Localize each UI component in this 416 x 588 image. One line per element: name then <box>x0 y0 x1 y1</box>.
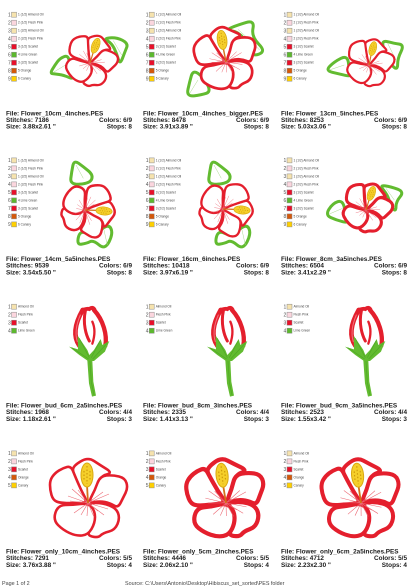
file details <box>281 548 407 569</box>
file details: File: Flower_only_5cm_2inches.PES <box>143 548 254 555</box>
colour legend: 2 (1/2) Flesh Pink <box>156 21 181 25</box>
file details: Size: 3.76x3.88 " <box>6 562 56 569</box>
colour legend: Flesh Pink <box>294 313 309 317</box>
colour legend: 3 <box>8 321 11 327</box>
colour legend: 7 <box>8 60 11 66</box>
colour legend: 5 Orange <box>156 69 169 73</box>
colour legend: 8 <box>146 68 149 74</box>
file details: Colors: 6/9 <box>99 263 132 270</box>
file details: Stitches: 10418 <box>143 263 190 270</box>
colour legend: 9 <box>146 77 149 83</box>
colour legend <box>8 12 44 83</box>
colour legend: Almond Oil <box>18 451 34 455</box>
file details: Colors: 4/4 <box>99 409 132 416</box>
file details: File: Flower_10cm_4inches.PES <box>6 110 104 117</box>
colour legend: 2 <box>284 20 286 26</box>
colour legend <box>146 158 182 228</box>
colour legend: 1 (1/2) Almond Oil <box>294 158 319 162</box>
panel: Flower_only_10cm_4inches <box>6 451 132 569</box>
colour legend: 1 (2/2) Almond Oil <box>294 174 319 178</box>
file details: File: Flower_bud_6cm_2a5inches.PES <box>6 402 123 409</box>
colour legend: 6 Canary <box>18 77 31 81</box>
icon: hibiscus with leaves <box>60 162 117 247</box>
icon: hibiscus with leaves <box>328 34 402 91</box>
colour legend: 4 <box>284 182 286 188</box>
colour legend: Almond Oil <box>156 305 172 309</box>
colour legend: 5 <box>8 190 11 196</box>
colour legend: 6 <box>284 52 286 58</box>
colour legend: 9 <box>8 222 11 228</box>
panel: Flower_16cm_6inches <box>143 158 269 276</box>
icon: hibiscus with leaves <box>198 162 255 247</box>
colour legend: 2 <box>146 459 149 465</box>
colour legend: 6 <box>284 198 286 204</box>
file details: File: Flower_bud_9cm_3a5inches.PES <box>281 402 398 409</box>
file details: Stitches: 6504 <box>281 263 324 270</box>
colour legend: 2 (1/2) Flesh Pink <box>294 21 319 25</box>
file details: Colors: 6/9 <box>99 117 132 124</box>
colour legend: 3 (1/2) Scarlet <box>294 45 314 49</box>
colour legend: 5 Orange <box>156 214 169 218</box>
colour legend: 3 (1/2) Scarlet <box>156 45 176 49</box>
colour legend: 1 (2/2) Almond Oil <box>294 29 319 33</box>
colour legend: 1 (1/2) Almond Oil <box>18 158 44 162</box>
file details <box>281 110 407 131</box>
colour legend: Flesh Pink <box>156 313 171 317</box>
file details: Size: 1.41x3.13 " <box>143 416 193 423</box>
icon: hibiscus with leaves <box>51 28 127 92</box>
file details: Stops: 8 <box>244 124 269 131</box>
file details: Size: 3.91x3.89 " <box>143 124 193 131</box>
panel: Flower_only_5cm_2inches <box>143 451 269 569</box>
colour legend: 1 <box>8 12 11 18</box>
file details: File: Flower_only_10cm_4inches.PES <box>6 548 121 555</box>
colour legend: 2 (1/2) Flesh Pink <box>18 166 43 170</box>
colour legend: 2 <box>284 459 286 465</box>
colour legend: Flesh Pink <box>156 459 171 463</box>
file details <box>143 402 269 423</box>
colour legend: 1 (1/2) Almond Oil <box>156 13 182 17</box>
file details: Stitches: 8478 <box>143 117 186 124</box>
file details: File: Flower_14cm_5a5inches.PES <box>6 256 111 263</box>
colour legend: 4 <box>146 475 149 481</box>
colour legend: 4 Lime Green <box>294 53 313 57</box>
panel: Flower_bud_6cm_2a5inches <box>6 304 132 423</box>
colour legend: 2 <box>8 459 11 465</box>
colour legend: 3 (2/2) Scarlet <box>294 61 314 65</box>
file details: Colors: 5/5 <box>99 555 132 562</box>
colour legend: 9 <box>146 222 149 228</box>
file details: Stops: 8 <box>382 270 407 276</box>
colour legend: 1 (1/2) Almond Oil <box>156 158 182 162</box>
colour legend: 3 <box>146 28 149 34</box>
file details: Stitches: 4446 <box>143 555 186 562</box>
colour legend: 1 <box>284 451 286 457</box>
file details: Stitches: 7186 <box>6 117 49 124</box>
colour legend: 3 <box>284 321 286 327</box>
file details: Stitches: 2335 <box>143 409 186 416</box>
colour legend: 3 <box>8 174 11 180</box>
file details: Stitches: 4712 <box>281 555 324 562</box>
file details: Colors: 4/4 <box>374 409 407 416</box>
colour legend: Flesh Pink <box>294 459 309 463</box>
file details: Stops: 3 <box>382 416 407 423</box>
colour legend: 8 <box>284 68 286 74</box>
colour legend: 3 <box>284 467 286 473</box>
page number: Page 1 of 2 <box>2 581 30 587</box>
file details: Stitches: 8253 <box>281 117 324 124</box>
file details: Stitches: 7291 <box>6 555 49 562</box>
colour legend: 5 <box>284 44 286 50</box>
colour legend: Orange <box>294 475 304 479</box>
colour legend: 5 Orange <box>294 214 307 218</box>
colour legend: 6 <box>146 52 149 58</box>
colour legend: 3 <box>8 28 11 34</box>
file details <box>281 402 407 423</box>
colour legend: 7 <box>284 206 286 212</box>
colour legend: 6 Canary <box>18 222 31 226</box>
colour legend: 3 (1/2) Scarlet <box>156 190 176 194</box>
file details: Stitches: 1968 <box>6 409 49 416</box>
file details: Colors: 6/9 <box>374 263 407 270</box>
file details: Colors: 6/9 <box>236 263 269 270</box>
colour legend: 3 <box>8 467 11 473</box>
file details <box>6 548 132 569</box>
file details: Size: 3.41x2.29 " <box>281 270 331 276</box>
colour legend: 2 (2/2) Flesh Pink <box>294 37 319 41</box>
colour legend: 4 <box>8 36 11 42</box>
colour legend: 6 Canary <box>156 222 169 226</box>
colour legend: 1 (2/2) Almond Oil <box>18 29 44 33</box>
colour legend: 3 (2/2) Scarlet <box>18 206 38 210</box>
colour legend: 4 <box>284 36 286 42</box>
colour legend: Canary <box>156 483 166 487</box>
colour legend: 8 <box>8 214 11 220</box>
colour legend: 7 <box>284 60 286 66</box>
icon: flower bud <box>207 308 247 397</box>
colour legend: 2 <box>8 20 11 26</box>
colour legend: 2 <box>8 313 11 319</box>
file details: Stops: 8 <box>244 270 269 276</box>
file details: Stops: 3 <box>107 416 132 423</box>
colour legend: 5 <box>146 190 149 196</box>
colour legend: 6 <box>8 52 11 58</box>
colour legend: 4 Lime Green <box>156 198 175 202</box>
colour legend: Scarlet <box>18 467 28 471</box>
colour legend: 3 <box>284 28 286 34</box>
colour legend: 3 (2/2) Scarlet <box>156 61 176 65</box>
colour legend: 2 <box>146 313 149 319</box>
colour legend <box>146 12 182 83</box>
colour legend: 6 Canary <box>156 77 169 81</box>
file details <box>6 256 132 276</box>
colour legend: 2 <box>284 313 286 319</box>
colour legend: 2 <box>8 166 11 172</box>
colour legend: 1 <box>284 305 286 311</box>
colour legend <box>146 451 172 489</box>
panel: Flower_14cm_5a5inches <box>6 158 132 276</box>
file details: Stops: 4 <box>107 562 132 569</box>
colour legend: 4 <box>146 329 149 335</box>
colour legend: 1 <box>146 305 149 311</box>
colour legend: 1 <box>284 158 286 164</box>
file details: Stops: 8 <box>382 124 407 131</box>
colour legend: 3 (1/2) Scarlet <box>18 45 38 49</box>
panel: Flower_only_6cm_2a5inches <box>281 451 407 569</box>
colour legend: 6 <box>8 198 11 204</box>
colour legend: 5 <box>146 483 149 489</box>
colour legend: 9 <box>284 77 286 83</box>
file details: Size: 1.55x3.42 " <box>281 416 331 423</box>
source path: Source: C:\Users\Antonio\Desktop\Hibiscus_set_sorted\PES folder <box>125 581 285 587</box>
panel: Flower_13cm_5inches <box>281 12 407 131</box>
colour legend: Scarlet <box>294 467 304 471</box>
colour legend: Orange <box>18 475 29 479</box>
colour legend: 1 <box>284 12 286 18</box>
file details: Size: 3.88x2.61 " <box>6 124 56 131</box>
colour legend: 1 <box>8 451 11 457</box>
colour legend: 4 <box>284 475 286 481</box>
colour legend <box>284 451 309 489</box>
colour legend: Scarlet <box>294 321 304 325</box>
colour legend: Almond Oil <box>18 305 34 309</box>
file details: Colors: 6/9 <box>374 117 407 124</box>
colour legend: Scarlet <box>156 321 166 325</box>
colour legend: 9 <box>284 222 286 228</box>
colour legend: 3 <box>284 174 286 180</box>
colour legend: 6 Canary <box>294 77 307 81</box>
colour legend: Canary <box>18 483 29 487</box>
colour legend: Flesh Pink <box>18 313 33 317</box>
colour legend: 1 (2/2) Almond Oil <box>156 174 182 178</box>
colour legend: 1 (1/2) Almond Oil <box>18 13 44 17</box>
colour legend: 4 <box>8 475 11 481</box>
colour legend: 6 Canary <box>294 222 307 226</box>
colour legend: 1 (2/2) Almond Oil <box>156 29 182 33</box>
colour legend: Orange <box>156 475 167 479</box>
colour legend: 1 (1/2) Almond Oil <box>294 13 319 17</box>
colour legend: Flesh Pink <box>18 459 33 463</box>
file details: File: Flower_only_6cm_2a5inches.PES <box>281 548 399 555</box>
colour legend <box>284 158 319 228</box>
colour legend: 3 <box>146 174 149 180</box>
colour legend: 1 <box>146 158 149 164</box>
colour legend: 3 (2/2) Scarlet <box>18 61 38 65</box>
panel: Flower_bud_8cm_3inches <box>143 304 269 423</box>
colour legend: Lime Green <box>18 329 35 333</box>
panel: Flower_10cm_4inches_bigger <box>143 12 269 131</box>
file details: Size: 2.06x2.10 " <box>143 562 193 569</box>
colour legend: 6 <box>146 198 149 204</box>
colour legend <box>8 451 34 489</box>
file details: Stitches: 2523 <box>281 409 324 416</box>
file details: Size: 2.23x2.30 " <box>281 562 331 569</box>
colour legend: 2 <box>146 20 149 26</box>
colour legend: Lime Green <box>156 329 173 333</box>
colour legend: 8 <box>146 214 149 220</box>
colour legend: 2 (2/2) Flesh Pink <box>156 37 181 41</box>
colour legend: 5 <box>284 190 286 196</box>
file details: Stops: 4 <box>244 562 269 569</box>
colour legend: 2 (2/2) Flesh Pink <box>18 182 43 186</box>
colour legend <box>284 304 310 334</box>
colour legend: 4 Lime Green <box>18 198 38 202</box>
colour legend: 3 <box>146 321 149 327</box>
file details: Stitches: 9539 <box>6 263 49 270</box>
colour legend: 3 (2/2) Scarlet <box>156 206 176 210</box>
colour legend: 4 Lime Green <box>18 53 38 57</box>
panel: Flower_bud_9cm_3a5inches <box>281 304 407 423</box>
colour legend: 4 Lime Green <box>156 53 175 57</box>
colour legend: Almond Oil <box>156 451 172 455</box>
colour legend: 1 <box>8 158 11 164</box>
icon: hibiscus flower <box>184 455 268 541</box>
colour legend: 4 <box>8 329 11 335</box>
file details: Size: 3.54x5.50 " <box>6 270 56 276</box>
file details <box>143 548 269 569</box>
colour legend: 5 Orange <box>294 69 307 73</box>
colour legend: Almond Oil <box>294 305 309 309</box>
file details: Colors: 6/9 <box>236 117 269 124</box>
colour legend: 3 (1/2) Scarlet <box>18 190 38 194</box>
colour legend <box>8 158 44 228</box>
file details: File: Flower_13cm_5inches.PES <box>281 110 379 117</box>
colour legend: 4 Lime Green <box>294 198 313 202</box>
colour legend: 7 <box>146 60 149 66</box>
colour legend: 4 <box>146 36 149 42</box>
colour legend: 5 Orange <box>18 69 32 73</box>
colour legend <box>8 304 35 334</box>
icon: flower bud <box>69 308 109 397</box>
file details: Stops: 8 <box>107 270 132 276</box>
colour legend <box>146 304 173 334</box>
colour legend: Almond Oil <box>294 451 309 455</box>
file details <box>6 110 132 131</box>
colour legend: 5 <box>284 483 286 489</box>
file details: Colors: 5/5 <box>236 555 269 562</box>
file details: File: Flower_bud_8cm_3inches.PES <box>143 402 253 409</box>
colour legend: Canary <box>294 483 304 487</box>
colour legend: 3 <box>146 467 149 473</box>
icon: hibiscus flower <box>319 456 403 540</box>
icon: hibiscus with leaves <box>328 176 402 238</box>
colour legend: 4 <box>146 182 149 188</box>
colour legend: 5 <box>8 44 11 50</box>
file details: File: Flower_16cm_6inches.PES <box>143 256 241 263</box>
colour legend: 4 <box>284 329 286 335</box>
colour legend: 7 <box>8 206 11 212</box>
colour legend: 2 (1/2) Flesh Pink <box>156 166 181 170</box>
file details <box>143 256 269 276</box>
colour legend: 8 <box>284 214 286 220</box>
colour legend: 5 <box>146 44 149 50</box>
file details <box>143 110 269 131</box>
file details: Size: 1.18x2.61 " <box>6 416 56 423</box>
colour legend: 1 (2/2) Almond Oil <box>18 174 44 178</box>
colour legend: 5 <box>8 483 11 489</box>
file details: Colors: 5/5 <box>374 555 407 562</box>
file details: Stops: 8 <box>107 124 132 131</box>
panel: Flower_10cm_4inches <box>6 12 132 131</box>
file details: Stops: 4 <box>382 562 407 569</box>
colour legend: Scarlet <box>156 467 166 471</box>
colour legend: 9 <box>8 77 11 83</box>
colour legend: 1 <box>146 12 149 18</box>
colour legend: Scarlet <box>18 321 28 325</box>
icon: flower bud <box>345 308 385 397</box>
colour legend: Lime Green <box>294 329 310 333</box>
file details: Stops: 3 <box>244 416 269 423</box>
colour legend: 5 Orange <box>18 214 32 218</box>
colour legend: 2 <box>146 166 149 172</box>
file details: Size: 3.97x6.19 " <box>143 270 193 276</box>
colour legend: 7 <box>146 206 149 212</box>
colour legend: 2 <box>284 166 286 172</box>
colour legend: 1 <box>146 451 149 457</box>
colour legend: 1 <box>8 305 11 311</box>
colour legend: 2 (2/2) Flesh Pink <box>18 37 43 41</box>
colour legend: 8 <box>8 68 11 74</box>
colour legend: 2 (1/2) Flesh Pink <box>294 166 319 170</box>
colour legend: 3 (1/2) Scarlet <box>294 190 314 194</box>
file details: Size: 5.03x3.06 " <box>281 124 331 131</box>
icon: hibiscus flower <box>50 459 127 537</box>
panel: Flower_8cm_3a5inches <box>281 158 407 276</box>
colour legend: 2 (1/2) Flesh Pink <box>18 21 43 25</box>
colour legend <box>284 12 319 83</box>
file details: File: Flower_8cm_3a5inches.PES <box>281 256 383 263</box>
colour legend: 2 (2/2) Flesh Pink <box>294 182 319 186</box>
file details: File: Flower_10cm_4inches_bigger.PES <box>143 110 264 117</box>
icon: hibiscus with leaves <box>188 22 263 96</box>
file details: Colors: 4/4 <box>236 409 269 416</box>
colour legend: 3 (2/2) Scarlet <box>294 206 314 210</box>
file details <box>6 402 132 423</box>
file details <box>281 256 407 276</box>
colour legend: 4 <box>8 182 11 188</box>
colour legend: 2 (2/2) Flesh Pink <box>156 182 181 186</box>
